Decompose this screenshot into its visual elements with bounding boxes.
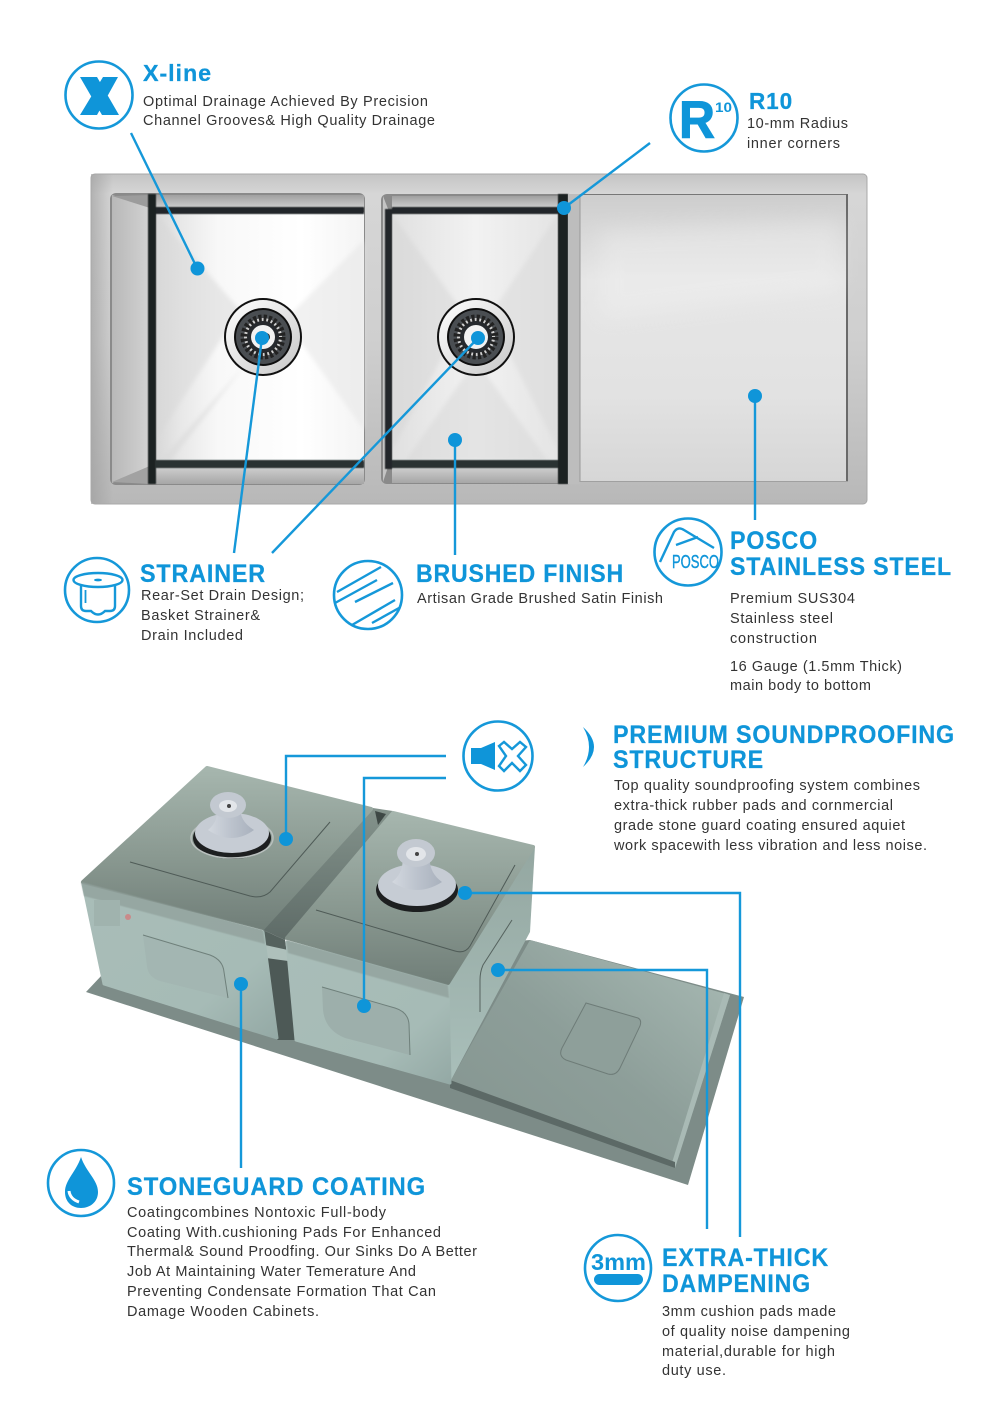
callout: brushed finish: BRUSHED FINISH bbox=[416, 560, 624, 588]
underside sink render bbox=[81, 768, 744, 1185]
icon: 3mm pad: 3mm bbox=[591, 1249, 646, 1275]
leader lines and dots bbox=[131, 133, 762, 1237]
callout: soundproofing: STRUCTURE bbox=[613, 746, 764, 774]
callout: stoneguard coating: Coatingcombines Nontoxic Full-body bbox=[127, 1205, 387, 1221]
bracket mark bbox=[583, 727, 594, 767]
icon: strainer bbox=[65, 558, 129, 622]
callout: soundproofing: work spacewith less vibration and less noise. bbox=[613, 838, 927, 854]
callout: POSCO: construction bbox=[730, 631, 817, 647]
callout: strainer: Rear-Set Drain Design; bbox=[141, 588, 304, 604]
callout: stoneguard coating: Coating With.cushioning Pads For Enhanced bbox=[127, 1225, 441, 1241]
flange bbox=[86, 940, 744, 1185]
drain right bbox=[437, 298, 515, 376]
icon: POSCO bbox=[654, 518, 722, 586]
callout: extra-thick dampening: material,durable for high bbox=[662, 1344, 835, 1360]
callout: R10: inner corners bbox=[747, 136, 840, 152]
icon: R10: 10 bbox=[715, 99, 732, 115]
callout: R10: 10-mm Radius bbox=[747, 116, 848, 132]
callout: strainer: Drain Included bbox=[141, 628, 243, 644]
callout: soundproofing: grade stone guard coating ensured aquiet bbox=[614, 818, 905, 834]
drain left bbox=[224, 298, 302, 376]
icon: X bbox=[66, 62, 132, 128]
callout: POSCO: Premium SUS304 bbox=[730, 591, 855, 607]
callout: X-line: Optimal Drainage Achieved By Precision bbox=[143, 94, 428, 110]
callout: extra-thick dampening: DAMPENING bbox=[662, 1270, 811, 1298]
callout: soundproofing: extra-thick rubber pads and cornmercial bbox=[614, 798, 893, 814]
callout: stoneguard coating: Preventing Condensate Formation That Can bbox=[127, 1284, 436, 1300]
callout: soundproofing: PREMIUM SOUNDPROOFING bbox=[613, 721, 955, 749]
callout: stoneguard coating bbox=[48, 1150, 477, 1320]
callout: POSCO bbox=[654, 518, 952, 694]
icon: R10: R bbox=[679, 91, 715, 150]
callout: POSCO: main body to bottom bbox=[730, 678, 871, 694]
left bowl bbox=[81, 768, 371, 1038]
callout: soundproofing: Top quality soundproofing system combines bbox=[614, 778, 920, 794]
callout: X-line bbox=[66, 60, 435, 129]
left basin bbox=[110, 193, 365, 485]
callout: extra-thick dampening: EXTRA-THICK bbox=[662, 1244, 829, 1272]
callout: stoneguard coating: Damage Wooden Cabinets. bbox=[127, 1304, 319, 1320]
callout: R10: R10 bbox=[749, 88, 793, 114]
icon: 3mm pad bbox=[585, 1235, 651, 1301]
callout: POSCO: POSCO bbox=[730, 527, 818, 555]
callout: extra-thick dampening: of quality noise dampening bbox=[662, 1324, 850, 1340]
callout: extra-thick dampening bbox=[585, 1235, 850, 1379]
icon: POSCO: POSCO bbox=[672, 552, 719, 572]
callout: POSCO: STAINLESS STEEL bbox=[730, 553, 952, 581]
callout: stoneguard coating: Job At Maintaining Water Temerature And bbox=[127, 1264, 416, 1280]
callout: POSCO: Stainless steel bbox=[730, 611, 833, 627]
callout: strainer: STRAINER bbox=[140, 560, 266, 588]
callout: strainer bbox=[65, 558, 304, 644]
icon: R10 bbox=[670, 84, 738, 152]
callout: stoneguard coating: STONEGUARD COATING bbox=[127, 1173, 426, 1201]
callout: extra-thick dampening: duty use. bbox=[662, 1363, 726, 1379]
right basin bbox=[381, 194, 581, 484]
callout: soundproofing bbox=[464, 721, 955, 854]
callout: POSCO: 16 Gauge (1.5mm Thick) bbox=[730, 659, 902, 675]
icon: muted speaker bbox=[464, 722, 532, 790]
gap between bowls bbox=[263, 808, 393, 940]
callout: X-line: X-line bbox=[143, 60, 212, 86]
callout: brushed finish bbox=[334, 560, 663, 629]
right bowl bbox=[286, 813, 535, 1083]
callout: X-line: Channel Grooves& High Quality Drainage bbox=[143, 113, 435, 129]
drainboard underside bbox=[450, 940, 730, 1168]
callout: strainer: Basket Strainer& bbox=[141, 608, 260, 624]
callout: brushed finish: Artisan Grade Brushed Satin Finish bbox=[417, 591, 663, 607]
drainboard bbox=[580, 194, 848, 482]
icon: water drop bbox=[48, 1150, 114, 1216]
callout: R10 bbox=[670, 84, 848, 152]
top-view sink photo bbox=[91, 174, 867, 504]
icon: brushed lines bbox=[334, 561, 402, 629]
callout: stoneguard coating: Thermal& Sound Proodfing. Our Sinks Do A Better bbox=[127, 1244, 477, 1260]
callout: extra-thick dampening: 3mm cushion pads made bbox=[662, 1304, 836, 1320]
